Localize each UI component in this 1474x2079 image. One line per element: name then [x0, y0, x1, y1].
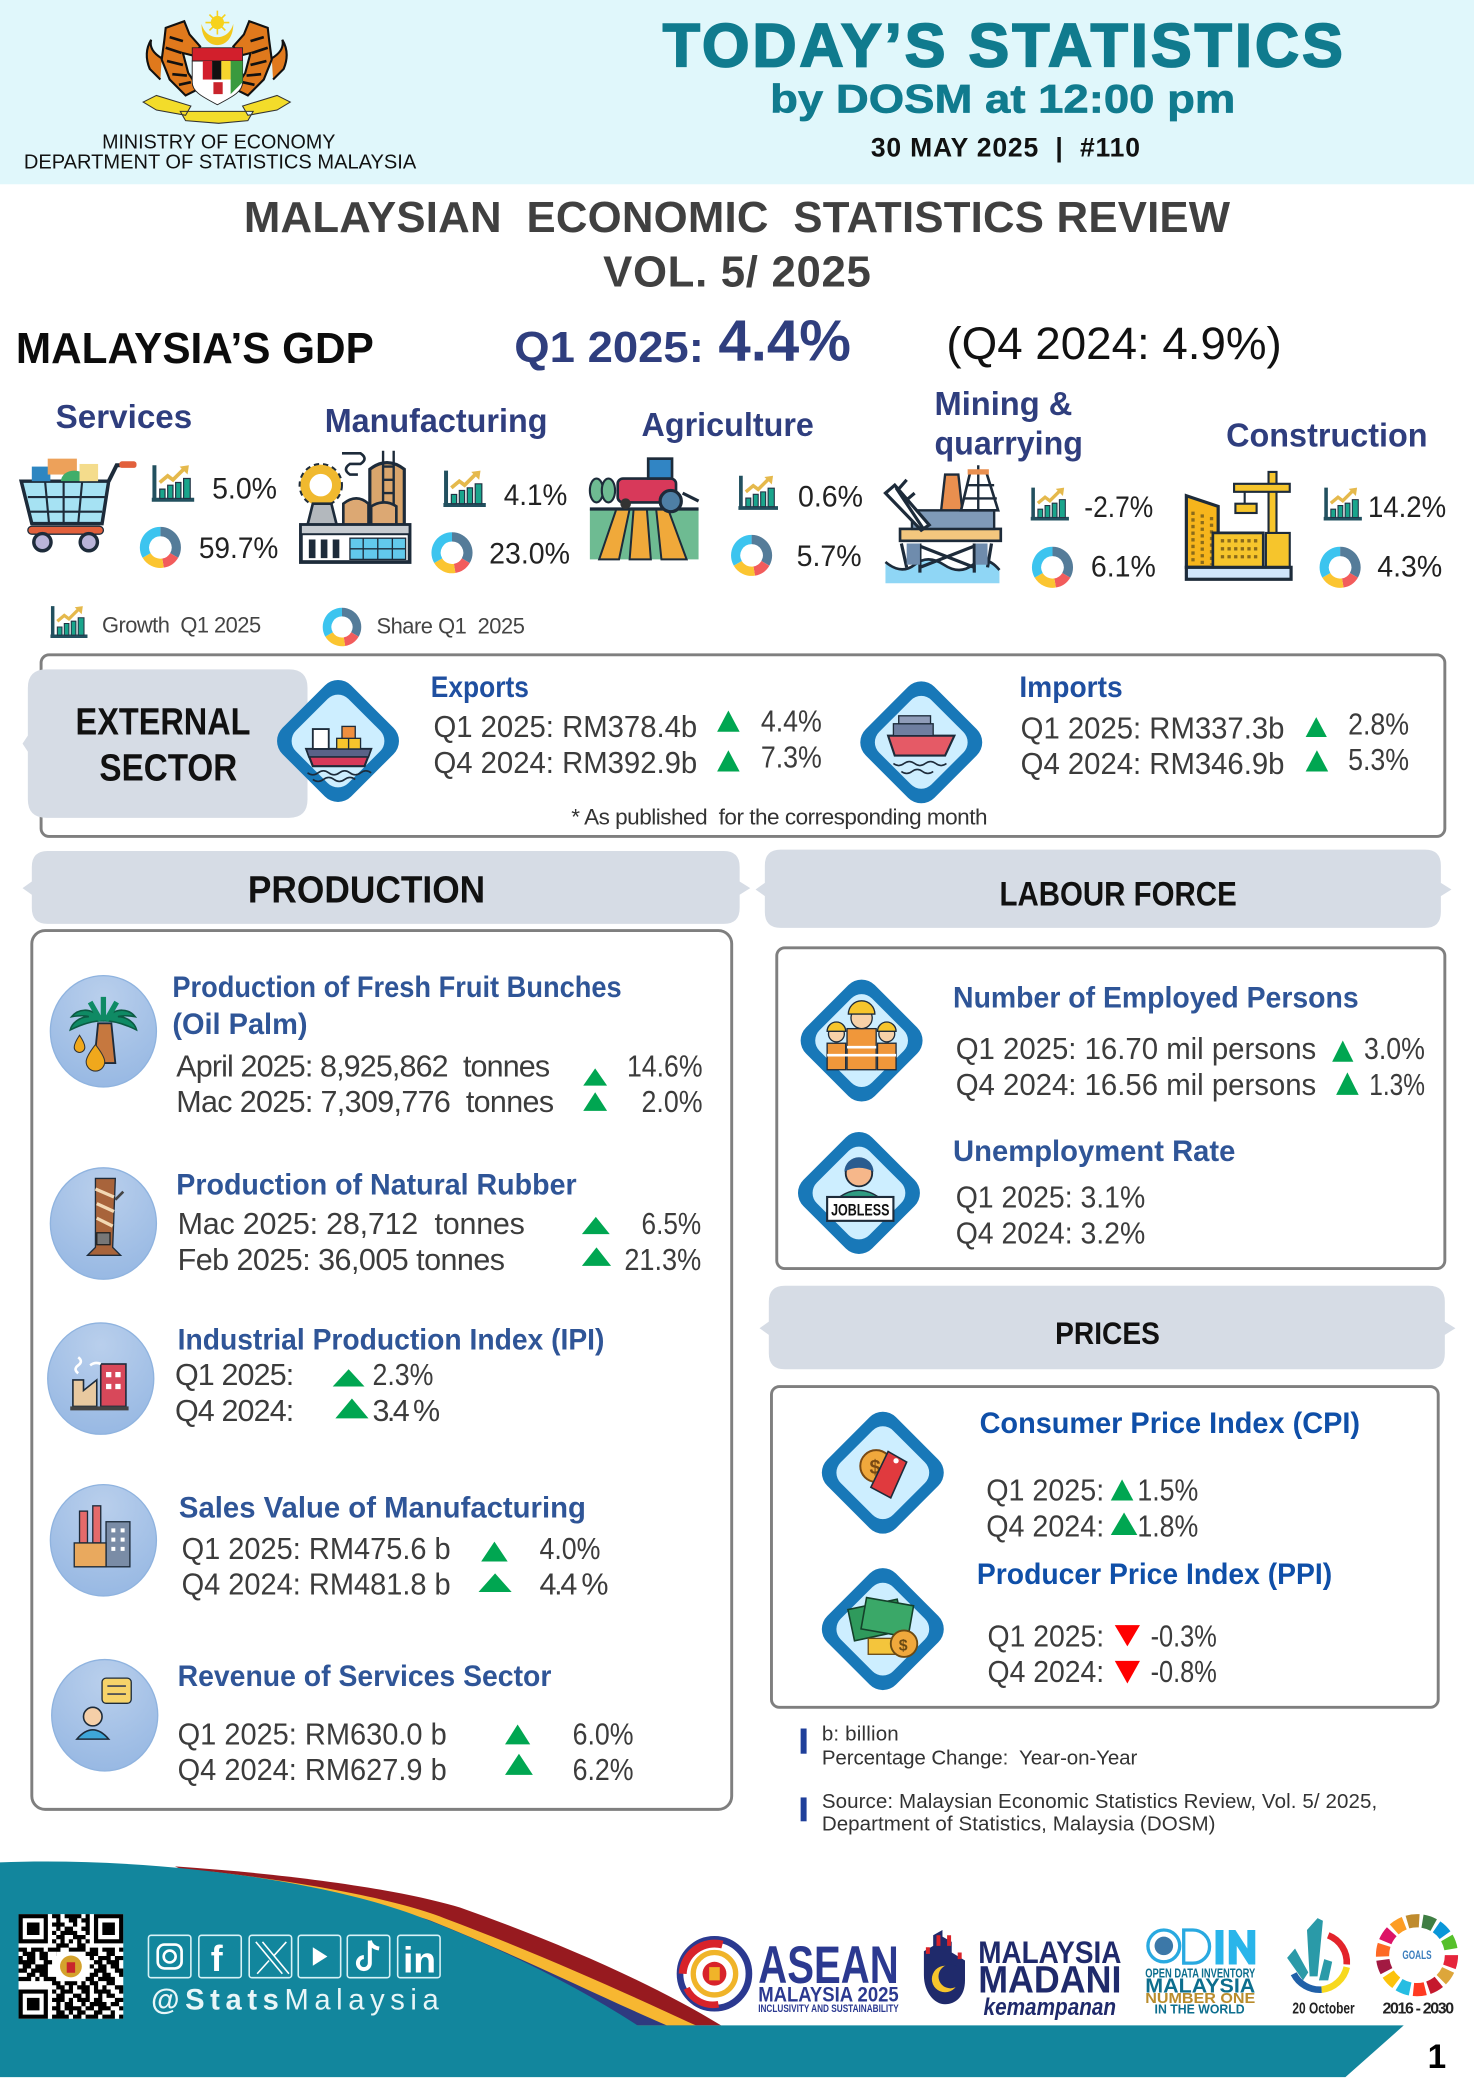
GDP headline: 4.4%	[718, 309, 851, 374]
item: fresh fruit bunches: (Oil Palm)	[172, 1009, 308, 1041]
panel: construction: 4.3%	[1377, 552, 1442, 584]
employed persons text: Q1 2025: 16.70 mil persons	[956, 1032, 1316, 1066]
panel: construction: Construction	[1226, 418, 1428, 455]
item: industrial production index: 2.3%	[372, 1358, 433, 1392]
logo: malaysia madani: kemampanan	[984, 1994, 1116, 2021]
item: natural rubber: Feb 2025: 36,005 tonnes	[178, 1243, 505, 1277]
panel: manufacturing: Manufacturing	[325, 403, 547, 440]
icon: industry	[48, 1323, 154, 1434]
main heading	[244, 193, 1231, 296]
icon: money: $	[899, 1637, 908, 1654]
panel: manufacturing: 4.1%	[504, 480, 567, 512]
cpi text: 1.5%	[1137, 1474, 1198, 1508]
ppi text: -0.8%	[1151, 1655, 1217, 1689]
exports text: Q1 2025: RM378.4b	[433, 710, 697, 744]
item: fresh fruit bunches: Mac 2025: 7,309,776 tonnes	[176, 1085, 554, 1119]
legend	[50, 606, 525, 642]
item: revenue of services: Revenue of Services Sector	[178, 1661, 551, 1693]
panel: agriculture: Agriculture	[642, 407, 814, 444]
item: natural rubber: 21.3%	[624, 1243, 701, 1277]
item: revenue of services: 6.0%	[573, 1717, 634, 1751]
employed persons text: 1.3%	[1369, 1068, 1425, 1102]
panel: mining and quarrying: -2.7%	[1084, 492, 1153, 524]
icon: growth	[1031, 488, 1069, 519]
panel: services	[21, 399, 278, 565]
panel: construction	[1186, 418, 1446, 584]
icon: workers	[819, 998, 904, 1083]
item: natural rubber: Mac 2025: 28,712 tonnes	[178, 1207, 525, 1241]
item: revenue of services: 6.2%	[573, 1753, 634, 1787]
ppi text: Q1 2025:	[988, 1619, 1104, 1653]
icon: coat of arms	[143, 11, 290, 123]
panel: services: 5.0%	[212, 473, 277, 505]
unemployment text: Unemployment Rate	[953, 1136, 1235, 1168]
logo: asean malaysia 2025: MALAYSIA 2025	[758, 1984, 899, 2007]
unemployment text: Q4 2024: 3.2%	[956, 1216, 1145, 1250]
imports text: 2.8%	[1348, 707, 1409, 741]
title: today's statistics: TODAY’S STATISTICS	[663, 11, 1343, 79]
exports text: Exports	[431, 672, 529, 704]
ministry text: DEPARTMENT OF STATISTICS MALAYSIA	[24, 150, 417, 173]
panel: agriculture: 5.7%	[797, 541, 862, 573]
icon: share	[736, 540, 767, 571]
ppi text: -0.3%	[1151, 1619, 1217, 1653]
ppi text: Producer Price Index (PPI)	[977, 1559, 1332, 1591]
icon: oil rig	[885, 465, 1001, 583]
imports text: Q4 2024: RM346.9b	[1021, 747, 1284, 781]
title: today's statistics: by DOSM at 12:00 pm	[770, 78, 1235, 122]
item: natural rubber: Production of Natural Rubber	[176, 1169, 577, 1201]
label: external sector	[23, 669, 308, 818]
logo: malaysia madani: MALAYSIA	[978, 1934, 1121, 1970]
social media icons: in	[403, 1940, 436, 1980]
legend: Growth Q1 2025	[102, 612, 261, 637]
banner: labour force	[756, 850, 1451, 928]
icon: share	[1324, 551, 1356, 583]
item: industrial production index	[48, 1323, 604, 1434]
unemployment text: Q1 2025: 3.1%	[956, 1181, 1145, 1215]
logo: sustainable development goals: GOALS	[1402, 1948, 1432, 1962]
label: external sector: SECTOR	[99, 747, 237, 790]
footer band with ribbons	[0, 1862, 1404, 2077]
item: industrial production index: 3.4 %	[372, 1394, 440, 1428]
panel: mining and quarrying: quarrying	[935, 426, 1083, 463]
ppi text	[977, 1559, 1332, 1689]
panel: labour force	[777, 948, 1445, 1269]
icon: jobless: JOBLESS	[831, 1201, 889, 1220]
icon: growth	[443, 471, 486, 505]
item: revenue of services	[52, 1660, 634, 1787]
icon: growth	[738, 476, 778, 508]
item: fresh fruit bunches	[50, 972, 703, 1119]
icon: price tag	[840, 1430, 925, 1515]
item: sales value of manufacturing: 4.0%	[539, 1532, 600, 1566]
employed persons text: Q4 2024: 16.56 mil persons	[956, 1068, 1316, 1102]
social handle: @Stats Malaysia	[151, 1985, 440, 2017]
item: industrial production index: Industrial Production Index (IPI)	[178, 1324, 604, 1356]
banner: prices: PRICES	[1055, 1315, 1160, 1351]
logo: malaysia madani: MADANI	[978, 1958, 1121, 2001]
icon: manufacturing plant	[50, 1485, 156, 1596]
GDP headline: MALAYSIA’S GDP	[16, 324, 374, 373]
imports text: Imports	[1019, 672, 1123, 704]
title: today's statistics	[663, 11, 1343, 122]
logo: sustainable development goals	[1383, 1921, 1454, 2018]
icon: oil palm	[50, 976, 156, 1087]
item: natural rubber: 6.5%	[642, 1207, 701, 1241]
banner: production: PRODUCTION	[248, 869, 485, 912]
ministry text	[24, 130, 417, 173]
logo: open data inventory: OPEN DATA INVENTORY	[1145, 1967, 1256, 1981]
item: fresh fruit bunches: April 2025: 8,925,862 tonnes	[176, 1049, 550, 1083]
item: fresh fruit bunches: 2.0%	[642, 1085, 703, 1119]
exports text: 4.4%	[761, 705, 822, 739]
GDP headline: Q1 2025:	[514, 323, 704, 372]
panel: agriculture: 0.6%	[798, 481, 863, 513]
icon: jobless	[817, 1151, 901, 1235]
logo: open data inventory: IN THE WORLD	[1155, 2003, 1245, 2017]
item: sales value of manufacturing: Q1 2025: RM475.6 b	[182, 1532, 451, 1566]
panel: construction: 14.2%	[1368, 492, 1446, 524]
header band	[0, 0, 1474, 184]
item: fresh fruit bunches: Production of Fresh Fruit Bunches	[172, 972, 622, 1004]
panel: agriculture	[590, 407, 863, 573]
panel: services: 59.7%	[199, 533, 278, 565]
cpi text	[980, 1408, 1360, 1543]
icon: price tag: $	[870, 1457, 881, 1479]
exports text	[431, 672, 822, 780]
unemployment text	[953, 1136, 1235, 1250]
panel: production	[32, 931, 732, 1809]
icon: rubber tree	[50, 1168, 156, 1279]
exports text: 7.3%	[761, 740, 822, 774]
icon: growth	[1324, 488, 1362, 519]
logo: asean malaysia 2025	[680, 1936, 899, 2015]
item: sales value of manufacturing: Sales Value of Manufacturing	[179, 1493, 586, 1525]
label: external sector: EXTERNAL	[76, 700, 251, 743]
item: sales value of manufacturing: 4.4 %	[539, 1568, 608, 1602]
date and issue: 30 MAY 2025 | #110	[871, 132, 1140, 162]
panel: mining and quarrying: 6.1%	[1091, 552, 1156, 584]
logo: asean malaysia 2025: INCLUSIVITY AND SUSTAINABILITY	[758, 2003, 899, 2015]
icon: share	[1037, 551, 1068, 583]
logo: national statistics day: 20 October	[1292, 2001, 1355, 2018]
item: revenue of services: Q4 2024: RM627.9 b	[178, 1753, 447, 1787]
item: sales value of manufacturing: Q4 2024: RM481.8 b	[182, 1568, 451, 1602]
main heading: MALAYSIAN ECONOMIC STATISTICS REVIEW	[244, 193, 1231, 242]
item: fresh fruit bunches: 14.6%	[627, 1049, 703, 1083]
QR code	[19, 1914, 123, 2019]
notes: b: billion	[822, 1722, 899, 1745]
cpi text: Q4 2024:	[986, 1509, 1104, 1543]
icon: export ship	[296, 699, 380, 783]
item: sales value of manufacturing	[50, 1485, 608, 1602]
item: industrial production index: Q1 2025:	[175, 1358, 294, 1392]
banner: labour force: LABOUR FORCE	[999, 875, 1237, 913]
banner: prices	[760, 1286, 1455, 1369]
employed persons text	[953, 982, 1425, 1102]
logo: asean malaysia 2025: ASEAN	[758, 1936, 899, 1995]
employed persons text: Number of Employed Persons	[953, 982, 1359, 1014]
logo: open data inventory	[1145, 1930, 1256, 2017]
imports text: 5.3%	[1348, 743, 1409, 777]
GDP headline	[16, 309, 1282, 374]
icon: shopping cart	[21, 459, 137, 551]
logo: malaysia madani	[924, 1930, 1121, 2021]
logo: open data inventory: NUMBER ONE	[1145, 1991, 1256, 2007]
notes	[801, 1722, 1377, 1836]
imports text	[1019, 672, 1409, 781]
page number: 1	[1428, 2038, 1446, 2076]
icon: import ship	[879, 700, 964, 785]
icon: share	[436, 537, 468, 569]
social media icons: f	[211, 1939, 223, 1979]
notes: Source: Malaysian Economic Statistics Review, Vol. 5/ 2025,	[822, 1790, 1377, 1813]
panel: external sector	[23, 655, 1445, 836]
banner: production	[23, 851, 750, 924]
icon: construction site	[1186, 472, 1291, 579]
notes: Percentage Change: Year-on-Year	[822, 1746, 1137, 1769]
icon: share	[144, 532, 176, 563]
employed persons text: 3.0%	[1364, 1032, 1425, 1066]
legend: Share Q1 2025	[376, 614, 525, 639]
panel: mining and quarrying	[885, 386, 1156, 584]
panel: manufacturing	[300, 403, 570, 570]
icon: money	[840, 1587, 925, 1672]
cpi text: 1.8%	[1137, 1509, 1198, 1543]
icon: factory	[300, 451, 410, 562]
panel: services: Services	[56, 399, 192, 436]
cpi text: Q1 2025:	[986, 1474, 1104, 1508]
icon: growth	[152, 465, 194, 500]
panel: prices	[771, 1387, 1438, 1707]
main heading: VOL. 5/ 2025	[603, 247, 871, 296]
item: industrial production index: Q4 2024:	[175, 1394, 294, 1428]
exports text: Q4 2024: RM392.9b	[433, 746, 697, 780]
ppi text: Q4 2024:	[988, 1655, 1104, 1689]
footnote: published: * As published for the corresponding month	[571, 804, 988, 829]
ministry text: MINISTRY OF ECONOMY	[102, 130, 336, 153]
notes: Department of Statistics, Malaysia (DOSM)	[822, 1813, 1216, 1836]
logo: open data inventory: MALAYSIA	[1145, 1975, 1255, 1997]
cpi text: Consumer Price Index (CPI)	[980, 1408, 1360, 1440]
panel: mining and quarrying: Mining &	[935, 386, 1072, 423]
logo: national statistics day	[1287, 1918, 1355, 2018]
item: revenue of services: Q1 2025: RM630.0 b	[178, 1717, 447, 1751]
social media icons	[148, 1935, 440, 1980]
icon: customer service	[52, 1660, 158, 1771]
item: natural rubber	[50, 1168, 701, 1279]
imports text: Q1 2025: RM337.3b	[1021, 711, 1284, 745]
icon: tractor	[590, 459, 699, 559]
panel: manufacturing: 23.0%	[489, 538, 570, 570]
GDP headline: (Q4 2024: 4.9%)	[946, 318, 1282, 369]
logo: sustainable development goals: 2016 - 2030	[1383, 2001, 1454, 2018]
